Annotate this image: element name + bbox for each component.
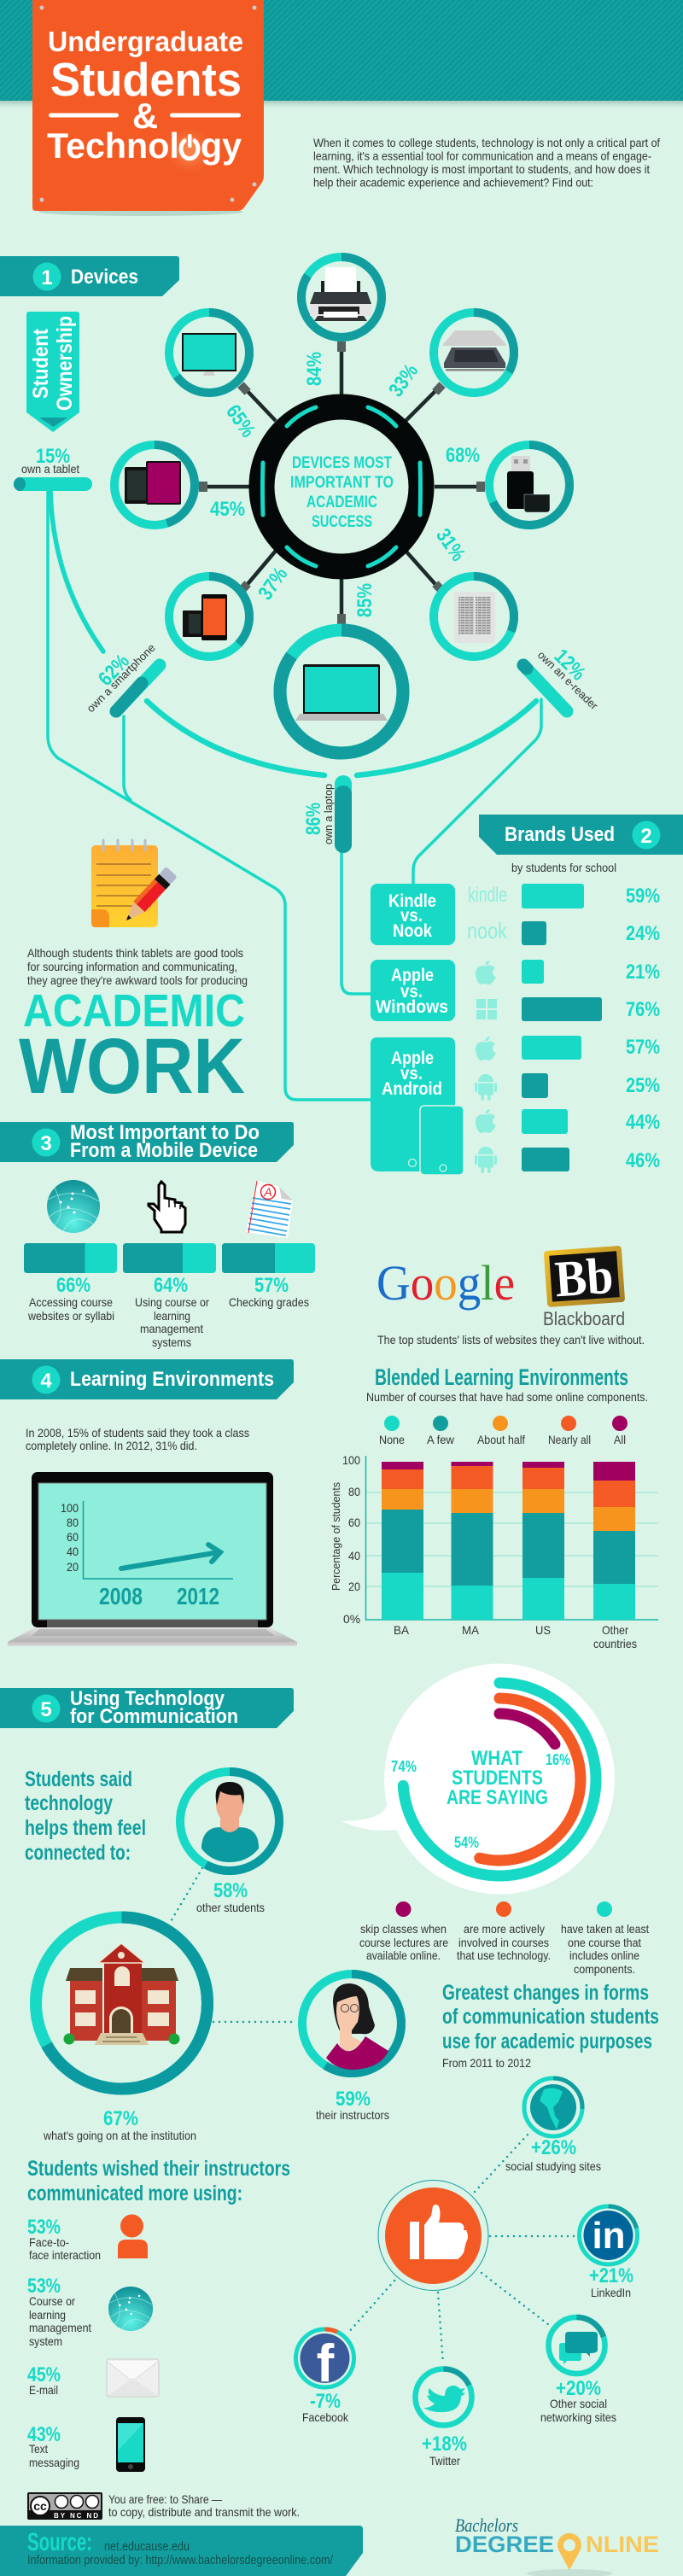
- mobile item: course websites: Accessing course: [29, 1295, 113, 1309]
- intro paragraph: help their academic experience and achievement? Find out:: [313, 176, 593, 190]
- student ownership tag: Student: [29, 328, 53, 399]
- circle: other students 58%: other students: [196, 1901, 265, 1914]
- brand pair: apple vs windows: 21%: [626, 961, 660, 984]
- saying legend: [359, 1901, 649, 1976]
- share notice: to copy, distribute and transmit the work.: [108, 2505, 300, 2519]
- student ownership tag: [26, 312, 79, 432]
- mobile item: course websites: websites or syllabi: [27, 1309, 114, 1323]
- saying legend: course lectures are: [359, 1936, 448, 1949]
- social: Twitter +18%: [415, 2369, 471, 2468]
- student ownership tag: Ownership: [53, 316, 77, 411]
- device: tablets 45%: [114, 445, 245, 525]
- mobile item: learning management: 64%: [154, 1274, 188, 1297]
- central hub: devices most important: [261, 406, 422, 567]
- stacked bar chart: MA: [462, 1623, 480, 1637]
- creative commons badge: [27, 2492, 102, 2520]
- section 3 ribbon: mobile: From a Mobile Device: [70, 1139, 258, 1162]
- title text: &: [132, 96, 158, 136]
- device: phones 37%: 37%: [254, 564, 292, 605]
- heading: students said: Students said: [25, 1767, 132, 1791]
- heading: students wished: communicated more using:: [27, 2182, 242, 2205]
- tablets paragraph: they agree they're awkward tools for producing: [27, 973, 248, 987]
- wish: face-to-face 53%: face interaction: [29, 2248, 101, 2262]
- circle: institution 67%: 67%: [103, 2107, 138, 2130]
- e-reader ownership: 12%: own an e-reader: [535, 648, 601, 713]
- brands subtitle: by students for school: [511, 861, 616, 874]
- mobile item: learning management: Using course or: [135, 1295, 209, 1309]
- social: LinkedIn +21%: [579, 2206, 637, 2299]
- footer source ribbon: [0, 2526, 363, 2576]
- mobile item: learning management: management: [140, 1322, 203, 1335]
- saying legend: skip classes when: [360, 1922, 447, 1936]
- laptop with line chart: 100: [61, 1501, 79, 1515]
- heading: blended learning: Number of courses that have had some online components.: [366, 1390, 648, 1404]
- section 3 ribbon: mobile: 3: [40, 1132, 52, 1155]
- footer source ribbon: Information provided by: http://www.bachelorsdegreeonline.com/: [27, 2553, 334, 2567]
- bar: MA: [451, 1462, 493, 1620]
- mobile item: checking grades: 57%: [254, 1274, 289, 1297]
- smartphone ownership: 62%: own a smartphone: [85, 641, 158, 715]
- laptop with line chart: 20: [67, 1560, 79, 1574]
- social: studying sites +26%: [505, 2078, 601, 2173]
- tablet ownership: 15%: own a tablet: [21, 462, 79, 476]
- title text: Technology: [47, 126, 242, 166]
- mobile item: checking grades: Checking grades: [229, 1295, 309, 1309]
- circle: instructors 59%: [302, 1974, 401, 2122]
- social: Facebook -7%: f: [317, 2334, 335, 2393]
- stacked bar chart: 0%: [343, 1612, 360, 1626]
- social: Twitter +18%: +18%: [422, 2433, 467, 2456]
- circle: institution 67%: [36, 1918, 207, 2142]
- circle: institution 67%: what's going on at the institution: [43, 2129, 196, 2142]
- mobile item: learning management: systems: [152, 1335, 191, 1349]
- heading: academic work: WORK: [19, 1023, 245, 1110]
- saying legend: are more actively: [464, 1922, 545, 1936]
- wish: course management 53%: management: [29, 2321, 91, 2334]
- social: LinkedIn +21%: in: [592, 2215, 626, 2257]
- stacked bar chart: US: [535, 1623, 551, 1637]
- stacked bar chart: 20: [348, 1580, 360, 1593]
- chart legend: [379, 1416, 628, 1446]
- central hub: devices most important: IMPORTANT TO: [290, 474, 394, 492]
- brand pair: apple vs android: 25%: [626, 1074, 660, 1097]
- e-reader ownership: 12%: 12%: [550, 645, 590, 685]
- wish: text messaging 43%: Text: [29, 2442, 48, 2456]
- laptop with line chart: 80: [67, 1516, 79, 1529]
- icon: power symbol: [179, 134, 200, 161]
- mobile item: course websites: 66%: [56, 1274, 90, 1297]
- logo: Blackboard: Bb: [553, 1247, 615, 1307]
- laptop with line chart: 2012: [177, 1583, 219, 1609]
- social connector dots: [348, 2133, 575, 2363]
- brand pair: apple vs windows: Windows: [376, 997, 448, 1017]
- circle: other students 58%: 58%: [213, 1879, 248, 1902]
- intro paragraph: learning, it's a essential tool for communication and a means of engage-: [313, 149, 651, 162]
- mobile item: checking grades: [222, 1181, 315, 1309]
- chart legend: A few: [427, 1433, 455, 1446]
- laptop with line chart: 2008: [99, 1583, 143, 1609]
- chart legend: Nearly all: [548, 1433, 591, 1446]
- speech bubble: what students are saying: STUDENTS: [452, 1767, 543, 1790]
- laptop ownership: 86%: 86%: [302, 803, 325, 835]
- device: tablets 45%: 45%: [210, 498, 245, 521]
- social: studying sites +26%: social studying sites: [505, 2159, 601, 2173]
- section 5 ribbon: communication: [0, 1687, 294, 1728]
- device: laptop 85%: [280, 583, 403, 753]
- section 3 ribbon: mobile: [0, 1121, 294, 1162]
- heading: blended learning: [366, 1364, 648, 1404]
- wish: text messaging 43%: messaging: [29, 2456, 79, 2469]
- circle: instructors 59%: their instructors: [316, 2108, 389, 2122]
- section 4 ribbon: learning environments: Learning Environments: [70, 1368, 274, 1391]
- stacked bar chart: Other: [602, 1623, 628, 1637]
- stacked bar chart: [330, 1453, 658, 1650]
- brand pair: kindle vs nook: Nook: [393, 921, 432, 941]
- brand pair: apple vs android: [371, 1036, 660, 1175]
- section 5 ribbon: communication: for Communication: [70, 1705, 238, 1728]
- social: other networking +20%: Other social: [550, 2397, 607, 2410]
- wish: email 45%: 45%: [27, 2363, 61, 2386]
- tablet ownership: 15%: [14, 445, 92, 491]
- logo: Blackboard: [543, 1246, 625, 1329]
- device: laptop 85%: 85%: [353, 583, 377, 617]
- mobile item: learning management: learning: [154, 1309, 190, 1323]
- laptop with line chart: 40: [67, 1545, 79, 1558]
- section 2 ribbon: brands used: 2: [640, 825, 652, 848]
- heading: greatest changes: From 2011 to 2012: [442, 2056, 531, 2070]
- social: Facebook -7%: [295, 2329, 353, 2424]
- tablets paragraph: [27, 946, 248, 987]
- wish: email 45%: [27, 2359, 159, 2397]
- social: studying sites +26%: +26%: [531, 2136, 576, 2159]
- device: printer 84%: [301, 257, 382, 386]
- wish: text messaging 43%: [27, 2417, 145, 2472]
- wish: text messaging 43%: 43%: [27, 2423, 61, 2446]
- tablet ownership: 15%: 15%: [36, 445, 70, 468]
- title text: [47, 26, 243, 166]
- brand pair: kindle vs nook: kindle: [468, 884, 507, 907]
- chart legend: About half: [477, 1433, 525, 1446]
- central hub: devices most important: DEVICES MOST: [292, 454, 392, 472]
- stacked bar chart: 40: [348, 1549, 360, 1563]
- speech bubble: what students are saying: 16%: [546, 1751, 570, 1768]
- header band: [0, 0, 683, 108]
- mobile item: learning management: [123, 1182, 216, 1349]
- device: scanner 33%: [384, 313, 514, 401]
- saying legend: components.: [574, 1962, 635, 1976]
- footer source ribbon: net.educause.edu: [104, 2539, 190, 2554]
- brand pair: apple vs windows: [371, 960, 660, 1021]
- online class text: [26, 1426, 249, 1452]
- section 2 ribbon: brands used: [479, 815, 683, 855]
- wish: course management 53%: Course or: [29, 2294, 75, 2308]
- stacked bar chart: countries: [593, 1637, 637, 1650]
- logo: Bachelors Degree Online: Bachelors: [455, 2515, 518, 2536]
- social: other networking +20%: +20%: [556, 2377, 601, 2400]
- speech bubble: what students are saying: 54%: [454, 1834, 479, 1851]
- device spokes: [199, 342, 485, 624]
- heading: greatest changes: [442, 1981, 659, 2070]
- heading: students said: [25, 1767, 146, 1865]
- section 5 ribbon: communication: 5: [40, 1698, 52, 1721]
- mobile item: course websites: [24, 1180, 117, 1323]
- laptop with line chart: [8, 1472, 297, 1646]
- heading: academic work: [19, 985, 245, 1110]
- social: Facebook -7%: Facebook: [302, 2410, 349, 2424]
- title panel: [32, 0, 264, 216]
- device: monitor 65%: 65%: [221, 400, 260, 441]
- heading: students said: technology: [25, 1791, 113, 1815]
- section 1 ribbon: devices: Devices: [71, 266, 138, 289]
- tablets paragraph: for sourcing information and communicating,: [27, 960, 237, 973]
- saying legend: involved in courses: [458, 1936, 549, 1949]
- device: printer 84%: 84%: [303, 352, 326, 386]
- brand pair: apple vs android: vs.: [400, 1064, 423, 1084]
- logo: Bachelors Degree Online: DEGREE: [455, 2532, 554, 2557]
- bar: US: [522, 1462, 564, 1620]
- wish: course management 53%: learning: [29, 2308, 66, 2322]
- brand pair: apple vs android: 46%: [626, 1149, 660, 1172]
- bar: BA: [382, 1462, 423, 1620]
- section 1 ribbon: devices: [0, 256, 179, 296]
- saying legend: that use technology.: [457, 1948, 551, 1962]
- device: monitor 65%: [169, 313, 260, 441]
- bar: other countries: [593, 1462, 635, 1620]
- social: LinkedIn +21%: +21%: [589, 2264, 633, 2287]
- laptop ownership: 86%: own a laptop: [322, 784, 335, 844]
- logo: Bachelors Degree Online: [455, 2515, 659, 2576]
- saying legend: one course that: [568, 1936, 641, 1949]
- logo: Blackboard: Blackboard: [543, 1308, 625, 1329]
- circle: instructors 59%: 59%: [336, 2088, 371, 2111]
- share notice: You are free: to Share —: [108, 2492, 222, 2506]
- brand pair: apple vs android: Android: [382, 1079, 442, 1099]
- connector dots: [170, 1868, 296, 2022]
- central hub: devices most important: ACADEMIC: [306, 494, 377, 511]
- device: USB drive 68%: [446, 444, 569, 525]
- brand pair: kindle vs nook: nook: [467, 918, 508, 943]
- mobile item: checking grades: A: [263, 1185, 272, 1199]
- creative commons badge: cc: [33, 2499, 47, 2513]
- section 3 ribbon: mobile: Most Important to Do: [70, 1121, 260, 1144]
- social: other networking +20%: networking sites: [540, 2410, 616, 2424]
- device: phones 37%: [169, 564, 292, 657]
- stacked bar chart: BA: [394, 1623, 410, 1637]
- online class text: In 2008, 15% of students said they took a class: [26, 1426, 249, 1440]
- stacked bar chart: 60: [348, 1516, 360, 1529]
- circle: other students 58%: [180, 1772, 279, 1914]
- brand pair: kindle vs nook: [371, 884, 660, 945]
- creative commons badge: BY NC ND: [54, 2512, 98, 2520]
- heading: students said: helps them feel: [25, 1816, 146, 1840]
- websites caption: The top students' lists of websites they can't live without.: [377, 1333, 645, 1346]
- speech bubble: what students are saying: WHAT: [471, 1747, 522, 1770]
- title text: Students: [50, 53, 242, 106]
- brand pair: kindle vs nook: Kindle: [388, 891, 436, 911]
- title text: Undergraduate: [48, 26, 243, 57]
- brand pair: apple vs android: 44%: [626, 1111, 660, 1134]
- laptop with line chart: 60: [67, 1530, 79, 1544]
- intro paragraph: [313, 136, 660, 190]
- share notice: [108, 2492, 300, 2519]
- social: Facebook -7%: -7%: [310, 2390, 341, 2413]
- stacked bar chart: 100: [342, 1453, 360, 1467]
- smartphone ownership: 62%: 62%: [94, 650, 134, 691]
- brand pair: kindle vs nook: 24%: [626, 922, 660, 945]
- stacked bar chart: 80: [348, 1485, 360, 1498]
- brand pair: kindle vs nook: vs.: [400, 906, 423, 926]
- heading: students wished: Students wished their instructors: [27, 2157, 290, 2181]
- section 5 ribbon: communication: Using Technology: [70, 1687, 225, 1710]
- social hub: thumbs up: [378, 2181, 488, 2290]
- brand pair: kindle vs nook: 59%: [626, 885, 660, 908]
- brand pair: apple vs windows: Apple: [391, 966, 434, 985]
- wish: face-to-face 53%: [27, 2215, 148, 2262]
- wish: email 45%: E-mail: [29, 2383, 58, 2397]
- device: e-reader 31%: [431, 524, 514, 657]
- speech bubble: what students are saying: ARE SAYING: [447, 1786, 548, 1809]
- brand pair: apple vs android: 57%: [626, 1036, 660, 1059]
- saying legend: includes online: [569, 1948, 639, 1962]
- wish: course management 53%: system: [29, 2334, 62, 2348]
- brand pair: apple vs android: Apple: [391, 1049, 434, 1068]
- section 4 ribbon: learning environments: 4: [40, 1370, 52, 1393]
- device: e-reader 31%: 31%: [431, 524, 470, 565]
- wish: face-to-face 53%: Face-to-: [29, 2235, 69, 2249]
- social: other networking +20%: [540, 2317, 616, 2424]
- device: scanner 33%: 33%: [384, 360, 423, 401]
- brand pair: apple vs windows: vs.: [400, 982, 423, 1002]
- section 1 ribbon: devices: 1: [41, 266, 53, 289]
- icon: notepad and pencil: [91, 840, 178, 927]
- icon: school building: [63, 1943, 179, 2045]
- central hub: devices most important: SUCCESS: [312, 513, 372, 531]
- heading: students said: connected to:: [25, 1841, 131, 1865]
- chart legend: All: [614, 1433, 626, 1446]
- stacked bar chart: Percentage of students: [330, 1482, 342, 1591]
- laptop ownership: 86%: [302, 775, 352, 853]
- heading: academic work: ACADEMIC: [23, 985, 245, 1037]
- speech bubble: what students are saying: 74%: [391, 1758, 417, 1775]
- online class text: completely online. In 2012, 31% did.: [26, 1439, 197, 1452]
- social: LinkedIn +21%: LinkedIn: [591, 2286, 631, 2299]
- speech bubble: what students are saying: [342, 1663, 615, 1894]
- logo: Bachelors Degree Online: NLINE: [586, 2532, 659, 2557]
- ownership connector lines: [48, 491, 541, 1100]
- saying legend: have taken at least: [561, 1922, 649, 1936]
- tablets paragraph: Although students think tablets are good tools: [27, 946, 243, 960]
- wish: course management 53%: 53%: [27, 2275, 61, 2298]
- intro paragraph: ment. Which technology is most important to students, and how does it: [313, 162, 650, 176]
- social: Twitter +18%: Twitter: [429, 2454, 460, 2468]
- wish: course management 53%: [27, 2275, 153, 2348]
- heading: students wished: [27, 2157, 290, 2205]
- section 4 ribbon: learning environments: [0, 1359, 294, 1399]
- saying legend: available online.: [366, 1948, 441, 1962]
- wish: face-to-face 53%: 53%: [27, 2216, 61, 2239]
- device: USB drive 68%: 68%: [446, 444, 480, 467]
- footer source ribbon: Source:: [27, 2528, 92, 2556]
- chart legend: None: [379, 1433, 405, 1446]
- brand pair: apple vs windows: 76%: [626, 998, 660, 1021]
- section 2 ribbon: brands used: Brands Used: [505, 823, 615, 846]
- logo: Google: Google: [377, 1255, 515, 1311]
